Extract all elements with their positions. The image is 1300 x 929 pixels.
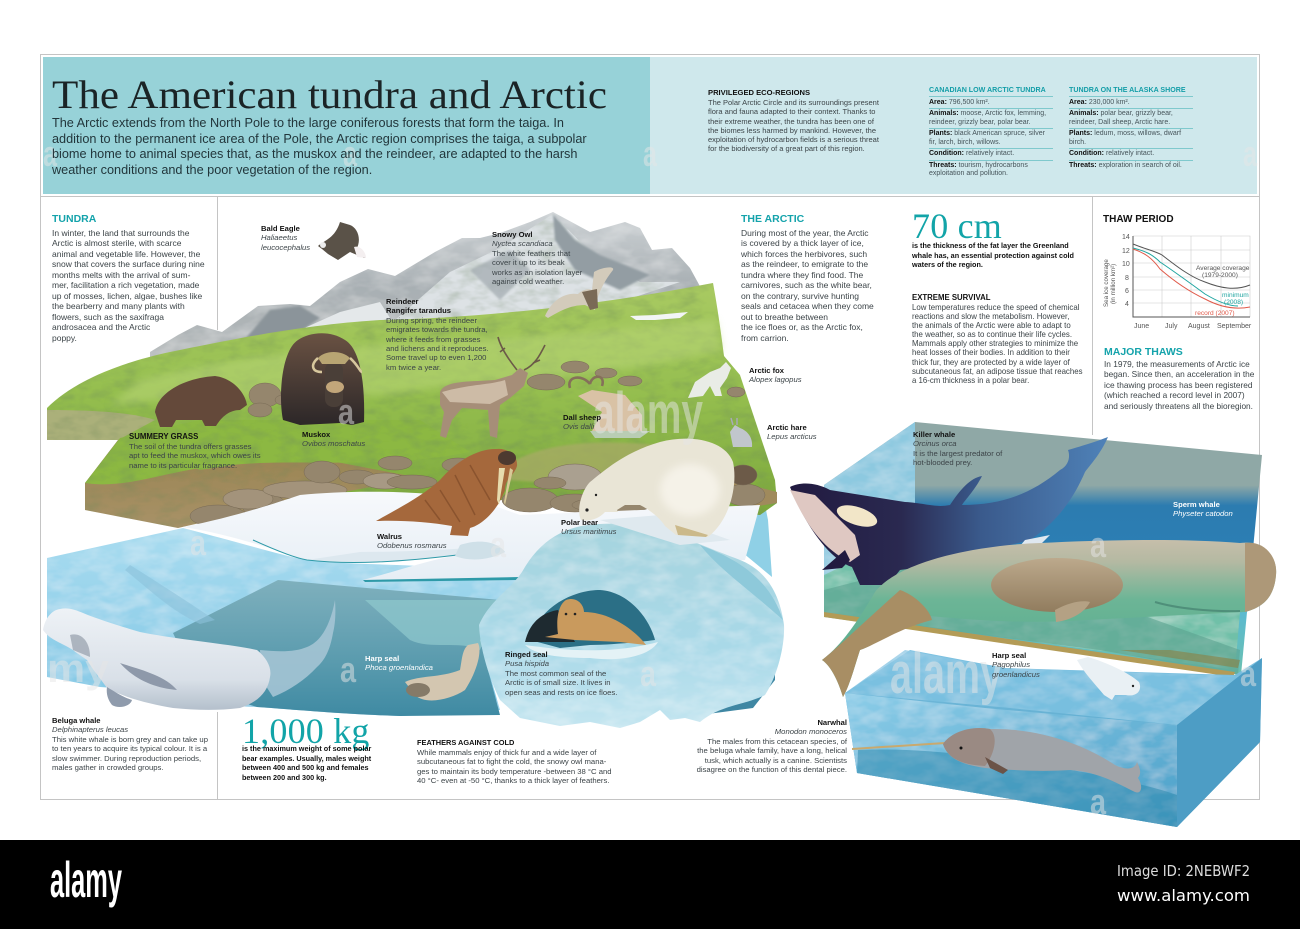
icon: white harp seal xyxy=(1077,657,1140,700)
rocks xyxy=(190,361,765,532)
text: major thaws: In 1979, the measurements of Arctic ice began. Since then, an acceleration in the ice thawing process has been registered (which reached a record level in 2007) and seriously threatens all the bioregion. xyxy=(1104,359,1254,411)
label: reindeer: Reindeer Rangifer tarandus During spring, the reindeer emigrates towards the tundra, where it feeds from grasses and lichens and it reproduces. Some travel up to even 1,200 km twice a year. xyxy=(386,297,489,372)
watermarks: a xyxy=(343,133,358,174)
watermarks xyxy=(43,133,1258,822)
thaw period chart: (in million km²) xyxy=(1110,264,1117,304)
table: canadian low arctic tundra: Area: 796,500 km². xyxy=(929,99,990,106)
thaw period chart: June xyxy=(1134,323,1149,330)
narwhal tank xyxy=(845,650,1262,827)
page frame xyxy=(40,54,1260,800)
mountains xyxy=(150,212,702,360)
label: sperm whale: Sperm whale Physeter catodon xyxy=(1173,500,1233,518)
snow shelf xyxy=(183,492,760,582)
heading: major thaws: MAJOR THAWS xyxy=(1104,346,1183,358)
icon: polar bear xyxy=(579,439,734,537)
icon: small muskox xyxy=(155,376,247,427)
watermarks: a xyxy=(1243,133,1258,174)
table: canadian low arctic tundra: CANADIAN LOW ARCTIC TUNDRA xyxy=(929,86,1046,94)
thaw period chart: minimum xyxy=(1222,292,1249,299)
table: tundra on the alaska shore: TUNDRA ON THE ALASKA SHORE xyxy=(1069,86,1186,94)
thaw period chart: August xyxy=(1188,323,1210,330)
table: tundra on the alaska shore: Animals: polar bear, grizzly bear, xyxy=(1069,110,1173,117)
table: canadian low arctic tundra: Threats: tourism, hydrocarbons xyxy=(929,162,1028,169)
thaw period chart: record (2007) xyxy=(1195,310,1235,317)
footer bar: alamy xyxy=(50,852,122,908)
icon: narwhal xyxy=(852,728,1141,793)
sea block xyxy=(47,528,775,716)
icon: arctic hare xyxy=(730,418,752,447)
stat text: 1,000 kg: is the maximum weight of some polar bear examples. Usually, males weight between 400 and 500 kg and females between 200 and 300 kg. xyxy=(242,744,371,782)
icon: snowy owl xyxy=(545,267,613,318)
label: ringed seal: Ringed seal Pusa hispida The most common seal of the Arctic is of small size. It lives in open seas and rests on ice floes. xyxy=(505,650,617,697)
table: tundra on the alaska shore: Plants: ledum, moss, willows, dwarf xyxy=(1069,130,1181,137)
thaw period chart xyxy=(1103,234,1252,330)
thaw period chart: 14 xyxy=(1122,234,1130,241)
icon: ringed seal xyxy=(545,599,646,645)
watermarks: a xyxy=(1240,653,1257,694)
table: canadian low arctic tundra: reindeer, grizzly bear, polar bear. xyxy=(929,119,1031,126)
label: polar bear: Polar bear Ursus maritimus xyxy=(561,518,617,536)
label: killer whale: Killer whale Orcinus orca It is the largest predator of hot-blooded prey. xyxy=(913,430,1002,467)
intro text: The Arctic extends from the North Pole to the large coniferous forests that form the taiga. In addition to the permanent ice area of the Pole, the Arctic region comprises the taiga, a subpolar biome home to animal species that, as the muskox and the reindeer, are adapted to the harsh weather conditions and the poor vegetation of the region. xyxy=(52,116,587,176)
label: harp seal: Harp seal Phoca groenlandica xyxy=(365,654,433,672)
label: dall sheep: Dall sheep Ovis dalli xyxy=(563,413,601,431)
thaw period chart: (1979-2000) xyxy=(1202,272,1238,279)
table: canadian low arctic tundra xyxy=(929,86,1053,177)
watermarks: a xyxy=(640,653,657,694)
watermarks: a xyxy=(190,522,207,563)
stat: 1,000 kg: 1,000 kg xyxy=(242,711,370,751)
icon: sperm whale xyxy=(822,540,1276,697)
thaw period chart: 12 xyxy=(1122,248,1130,255)
icon: reindeer xyxy=(440,337,545,438)
icon: killer whale xyxy=(790,437,1108,585)
icon: harp seal xyxy=(405,643,479,700)
table: canadian low arctic tundra: exploitation and pollution. xyxy=(929,170,1008,177)
stat: 70 cm: 70 cm xyxy=(912,206,1002,246)
icon: walrus xyxy=(376,449,517,536)
thaw period chart: 4 xyxy=(1125,301,1129,308)
icon: dall sheep xyxy=(569,377,650,438)
tundra land xyxy=(47,283,777,528)
label: beluga whale: Beluga whale Delphinapterus leucas This white whale is born grey and can take up to ten years to acquire its typical colour. It is a slow swimmer. During reproduction periods, males gather in crowded groups. xyxy=(52,716,208,772)
label: narwhal: Narwhal Monodon monoceros The males from this cetacean species, of the beluga whale family, have a long, helical tusk, which actually is a canine. Scientists disagree on the function of this dental piece. xyxy=(697,718,847,774)
watermarks: alamy xyxy=(890,641,1002,706)
table: tundra on the alaska shore: Threats: exploration in search of oil. xyxy=(1069,162,1182,169)
watermarks: a xyxy=(643,133,658,174)
watermarks: alamy xyxy=(593,381,703,446)
icon: beluga whale xyxy=(43,600,335,710)
watermarks: a xyxy=(1090,781,1107,822)
table: canadian low arctic tundra: Plants: black American spruce, silver xyxy=(929,130,1045,137)
label: summery grass: SUMMERY GRASS The soil of the tundra offers grasses apt to feed the muskox, which owes its name to its particular fragrance. xyxy=(129,432,261,470)
table: tundra on the alaska shore: birch. xyxy=(1069,139,1086,146)
text: tundra: In winter, the land that surrounds the Arctic is almost sterile, with scarce animal and vegetable life. However, the snow that covers the surface during nine months melts with the arrival of sum- mer, facilitation a rich vegetation, made up of mosses, lichen, algae, bushes like the bearberry and many plants with flowers, such as the saxifraga androsacea and the Arctic poppy. xyxy=(52,228,205,343)
table: tundra on the alaska shore xyxy=(1069,86,1193,169)
label: muskox: Muskox Ovibos moschatus xyxy=(302,430,365,448)
label: snowy owl: Snowy Owl Nyctea scandiaca The white feathers that cover it up to its beak works as an isolation layer against cold weather. xyxy=(492,230,582,286)
table: canadian low arctic tundra: Animals: moose, Arctic fox, lemming, xyxy=(929,110,1046,117)
thaw period chart: July xyxy=(1165,323,1178,330)
icon: muskox xyxy=(281,333,364,425)
title: The American tundra and Arctic xyxy=(52,72,607,117)
watermarks: a xyxy=(43,133,58,174)
thaw period chart: 8 xyxy=(1125,275,1129,282)
thaw period chart: (2008) xyxy=(1224,299,1243,306)
watermarks: my xyxy=(47,647,110,691)
ice spike xyxy=(737,480,772,577)
label: arctic hare: Arctic hare Lepus arcticus xyxy=(767,423,817,441)
thaw period chart: Average coverage xyxy=(1196,265,1250,272)
heading: the arctic: THE ARCTIC xyxy=(741,213,804,225)
footer bar xyxy=(0,840,1300,929)
text: extreme survival: EXTREME SURVIVAL Low temperatures reduce the speed of chemical reactions and slow the metabolism. However, the animals of the Arctic were able to adapt to the weather, so as to continue their life cycles. Mammals apply other strategies to minimize the heat losses of their bodies. In addition to their thick fur, they are protected by a wide layer of subcutaneous fat, an adipose tissue that reaches a 16-cm thickness in a polar bear. xyxy=(912,293,1082,385)
thaw period chart: Sea ice coverage xyxy=(1103,259,1110,307)
table: canadian low arctic tundra: Condition: relatively intact. xyxy=(929,150,1014,157)
heading: thaw period: THAW PERIOD xyxy=(1103,214,1174,225)
footer bar: www.alamy.com xyxy=(1117,886,1250,905)
icon: bald eagle xyxy=(318,222,366,260)
ice dome with seal den xyxy=(479,524,784,728)
label: bald eagle: Bald Eagle Haliaeetus leucocephalus xyxy=(261,224,310,252)
header panels xyxy=(43,57,1257,194)
label: walrus: Walrus Odobenus rosmarus xyxy=(377,532,447,550)
text: feathers against cold: FEATHERS AGAINST COLD While mammals enjoy of thick fur and a wide layer of subcutaneous fat to fight the cold, the snowy owl mana- ges to maintain its body temperature -between 38 °C and 40 °C- even at -50 °C, thanks to a thick layer of feathers. xyxy=(417,738,612,785)
footer bar: Image ID: 2NEBWF2 xyxy=(1117,862,1250,880)
table: tundra on the alaska shore: Area: 230,000 km². xyxy=(1069,99,1130,106)
thaw period chart: September xyxy=(1217,323,1252,330)
table: tundra on the alaska shore: reindeer, Dall sheep, Arctic hare. xyxy=(1069,119,1170,126)
icon: arctic fox xyxy=(688,362,731,398)
thaw period chart: 6 xyxy=(1125,288,1129,295)
text: the arctic: During most of the year, the Arctic is covered by a thick layer of ice, which forces the herbivores, such as the reindeer, to emigrate to the tundra where they find food. The carnivores, such as the white bear, on the contrary, survive hunting seals and cetacea when they come out to breathe between the ice floes or, as the Arctic fox, from carrion. xyxy=(741,228,874,343)
watermarks: a xyxy=(338,391,355,432)
orca tank xyxy=(824,422,1262,677)
heading: tundra: TUNDRA xyxy=(52,213,96,225)
snow under bear xyxy=(600,515,730,545)
thaw period chart: 10 xyxy=(1122,261,1130,268)
watermarks: a xyxy=(340,649,357,690)
table: canadian low arctic tundra: fir, larch, birch, willows. xyxy=(929,139,1001,146)
label: harp seal (right): Harp seal Pagophilus groenlandicus xyxy=(992,651,1040,679)
stat text: 70 cm: is the thickness of the fat layer the Greenland whale has, an essential protection against cold waters of the region. xyxy=(912,241,1074,269)
text: privileged eco-regions: PRIVILEGED ECO-REGIONS The Polar Arctic Circle and its surroundings present flora and fauna adapted to their context. Thanks to their extreme weather, the tundra has been one of the biomes less harmed by mankind. However, the exploitation of hydrocarbon fields is a serious threat for the biodiversity of a great part of this region. xyxy=(708,88,879,153)
watermarks: a xyxy=(1090,524,1107,565)
table: tundra on the alaska shore: Condition: relatively intact. xyxy=(1069,150,1154,157)
watermarks: a xyxy=(490,524,507,565)
label: arctic fox: Arctic fox Alopex lagopus xyxy=(749,366,802,384)
